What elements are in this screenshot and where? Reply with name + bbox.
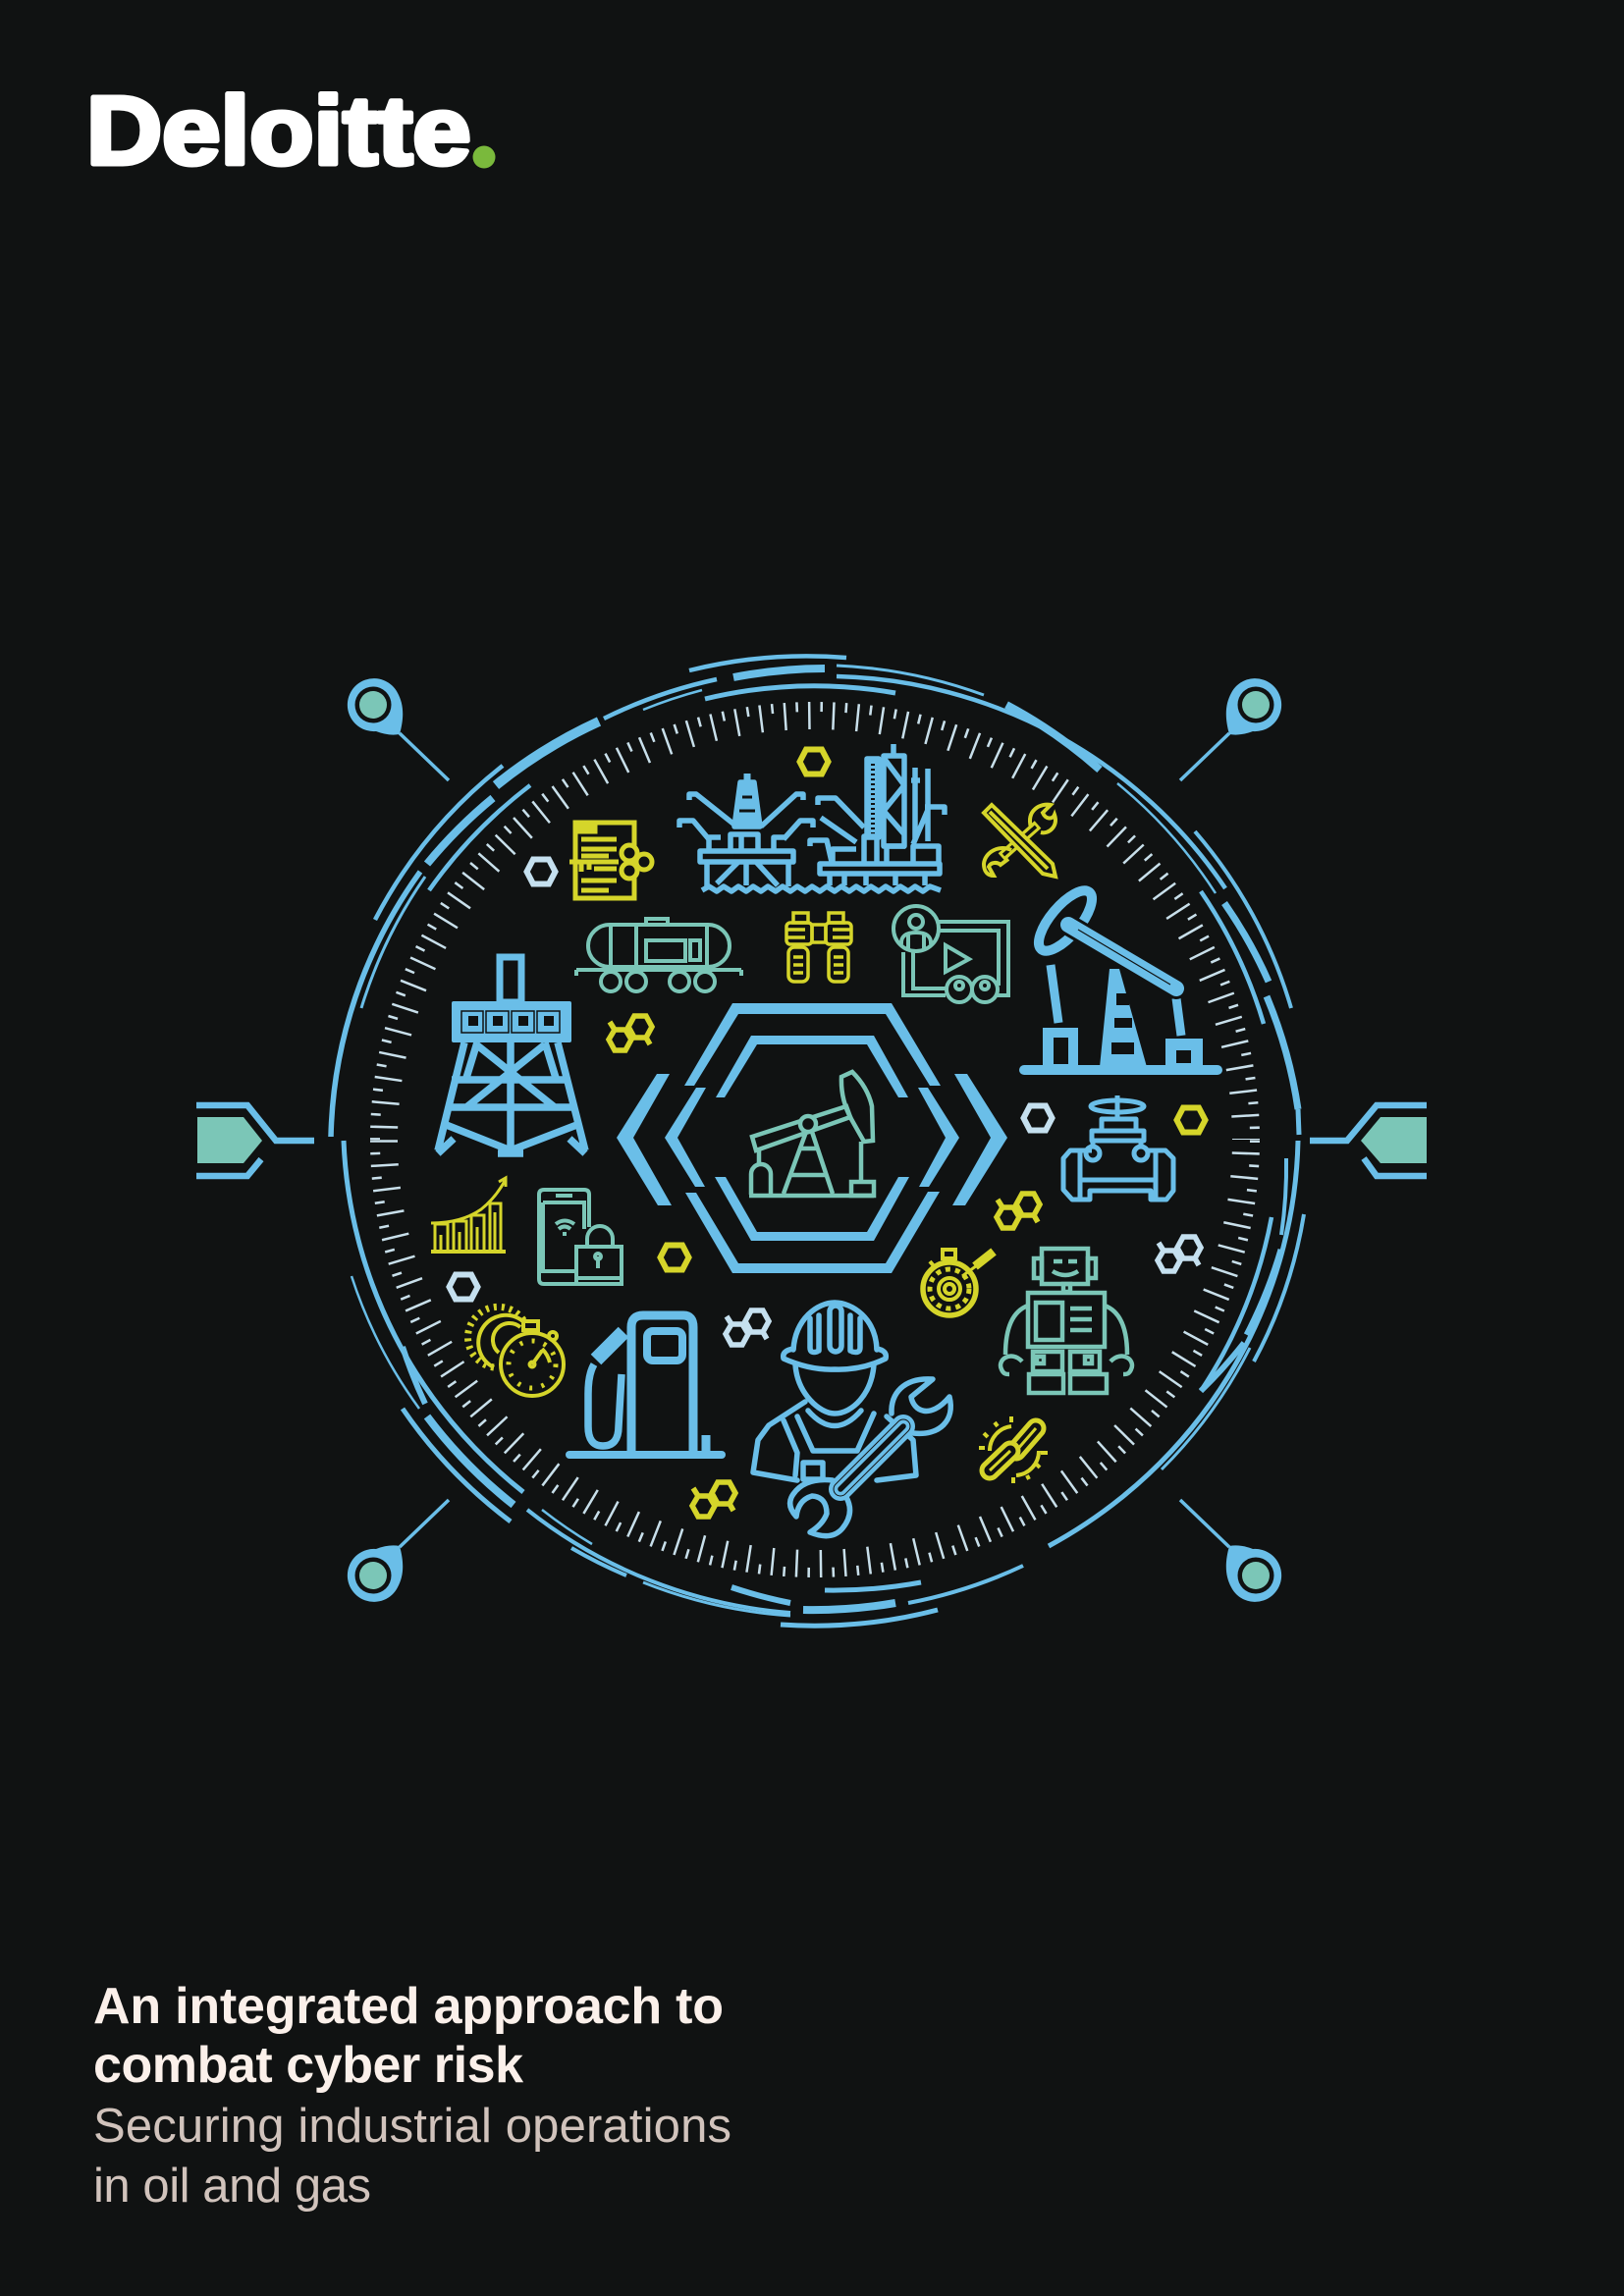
icon: offshore rigs <box>679 744 945 891</box>
icon: worker with wrench <box>753 1303 950 1536</box>
icon: broken chain <box>979 1416 1048 1483</box>
heading: An integrated approach to <box>93 1978 724 2035</box>
circular gauge <box>331 656 1304 1626</box>
icon: wrench and pencil <box>984 805 1056 877</box>
heading: combat cyber risk <box>93 2037 523 2094</box>
arrow: right connector <box>1310 1105 1427 1176</box>
heading <box>93 1978 724 2094</box>
hexagon accents <box>450 750 1206 1517</box>
icon: gears and stopwatch <box>468 1307 564 1396</box>
icon: robot <box>1001 1249 1132 1393</box>
icon: growth chart <box>431 1178 506 1252</box>
icon: rail tanker <box>576 919 741 991</box>
Deloitte logo: Deloitte <box>86 77 471 185</box>
subheading <box>93 2100 731 2213</box>
arrow: left connector <box>196 1105 314 1176</box>
pin: bottom right <box>1180 1500 1281 1602</box>
icon: phone and lock <box>539 1190 622 1284</box>
icon: large pumpjack <box>1024 882 1218 1070</box>
tick marks <box>375 707 1255 1573</box>
icon: binoculars <box>786 913 851 982</box>
pin: top right <box>1180 678 1281 780</box>
pin: top left <box>348 678 449 780</box>
subheading: Securing industrial operations <box>93 2100 731 2153</box>
icon: timer target <box>923 1250 994 1315</box>
icon: valve <box>1063 1095 1173 1200</box>
segmented outer ring <box>331 656 1304 1626</box>
icon: document <box>569 823 652 898</box>
icon: derrick tower <box>438 957 585 1153</box>
central hexagon frame <box>617 1003 1007 1273</box>
icon: video training <box>893 906 1008 1002</box>
icon: fuel pump <box>569 1315 722 1455</box>
title block <box>93 1978 731 2213</box>
icon: central pumpjack <box>749 1072 874 1196</box>
pin: bottom left <box>348 1500 449 1602</box>
subheading: in oil and gas <box>93 2160 371 2213</box>
